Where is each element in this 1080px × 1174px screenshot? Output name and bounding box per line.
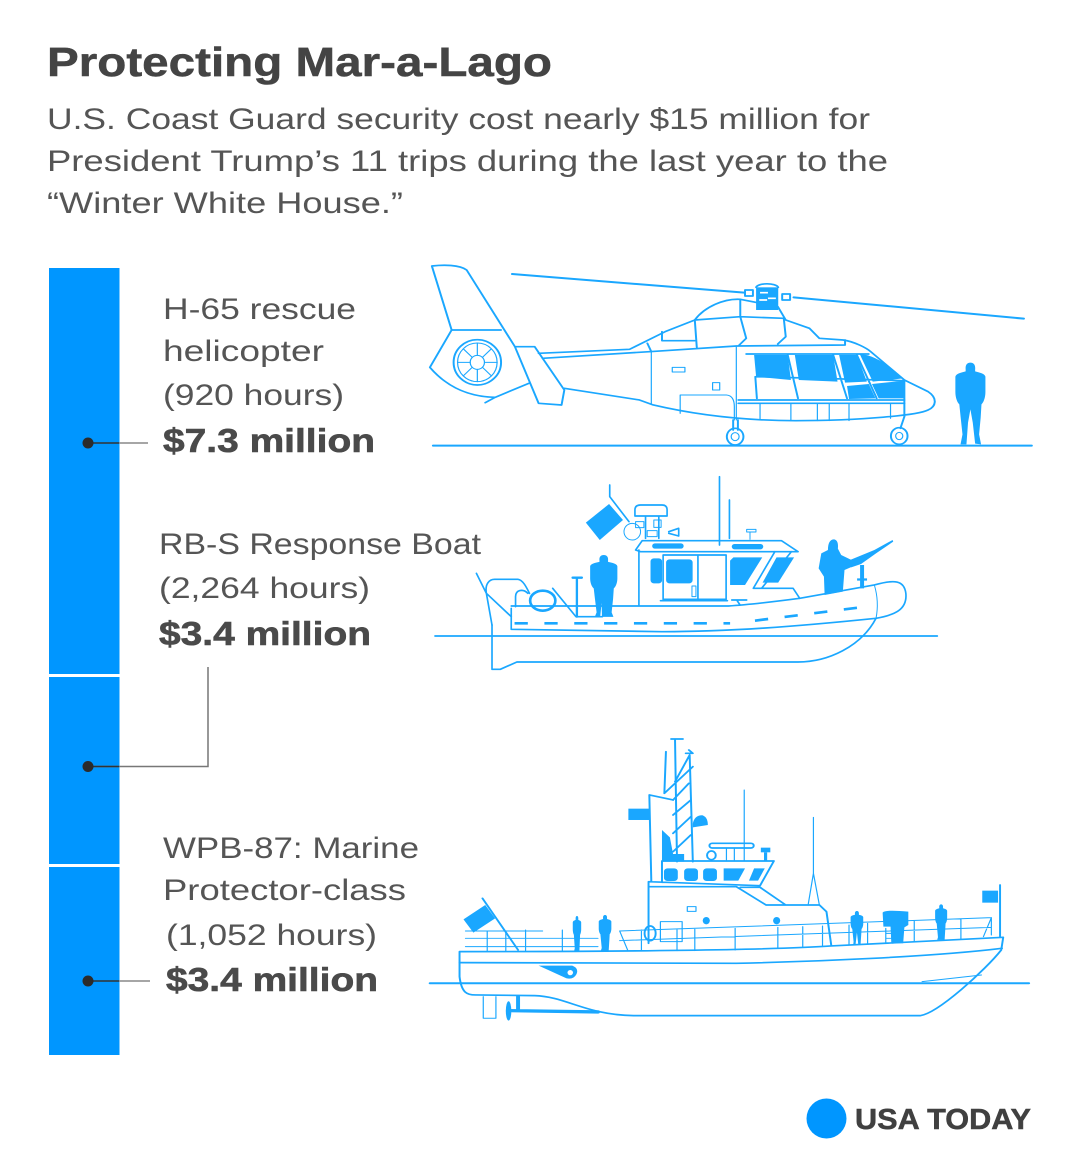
subtitle: “Winter White House.”	[47, 187, 403, 220]
USA TODAY logo: USA TODAY	[855, 1104, 1031, 1136]
icon: response boat with crew	[435, 477, 937, 669]
subtitle: U.S. Coast Guard security cost nearly $15 million for	[47, 103, 870, 136]
icon: marine protector ship with crew	[430, 739, 1029, 1021]
icon: helicopter with person	[430, 265, 1032, 446]
label: marine protector: Protector-class	[163, 874, 406, 907]
USA TODAY logo	[806, 1098, 1031, 1138]
label: response boat	[159, 528, 482, 652]
subtitle: President Trump’s 11 trips during the last year to the	[47, 145, 888, 178]
leader line: response boat	[82, 667, 208, 772]
subtitle	[47, 103, 888, 220]
label: helicopter: $7.3 million	[163, 422, 375, 459]
label: response boat: $3.4 million	[159, 615, 371, 652]
label: helicopter: (920 hours)	[163, 379, 344, 412]
label: response boat: (2,264 hours)	[159, 572, 370, 605]
label: marine protector: WPB-87: Marine	[163, 832, 419, 865]
title: Protecting Mar-a-Lago	[47, 39, 552, 85]
label: helicopter: helicopter	[163, 335, 324, 368]
stacked cost bar	[49, 268, 120, 1055]
leader line: helicopter	[82, 438, 148, 448]
label: helicopter	[163, 293, 375, 459]
label: marine protector: $3.4 million	[166, 961, 378, 998]
label: response boat: RB-S Response Boat	[159, 528, 482, 561]
label: helicopter: H-65 rescue	[163, 293, 356, 326]
label: marine protector: (1,052 hours)	[166, 919, 377, 952]
label: marine protector	[163, 832, 419, 998]
leader line: marine protector	[82, 976, 150, 986]
